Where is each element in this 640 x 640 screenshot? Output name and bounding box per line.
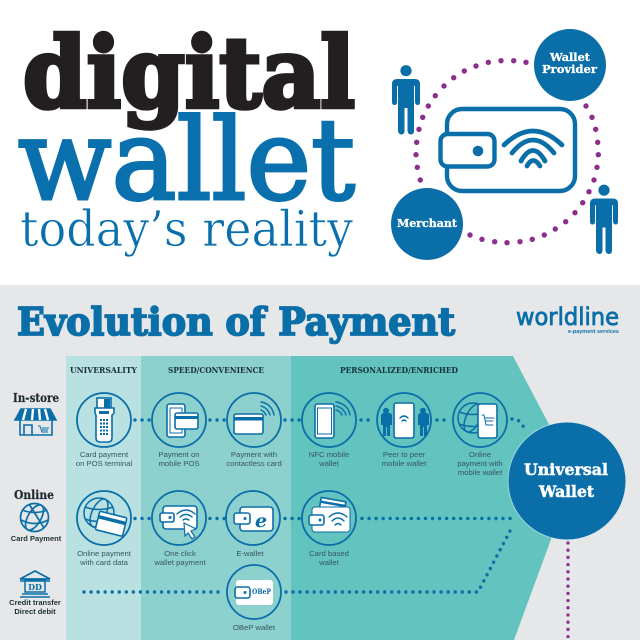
circle: merchant: Merchant xyxy=(397,216,458,230)
row label: credit transfer / direct debit xyxy=(9,571,61,616)
step: NFC mobile wallet: NFC mobile xyxy=(309,450,349,459)
connector dots: row 3 to universal wallet xyxy=(84,531,510,592)
step: online payment with card data: Online payment xyxy=(77,549,132,558)
logo: worldline: worldline xyxy=(516,303,619,331)
icon: bank: DD xyxy=(28,582,42,592)
step: card based wallet xyxy=(302,491,356,567)
step: one click wallet payment: wallet payment xyxy=(153,558,206,567)
row label: in-store xyxy=(13,391,59,435)
step: card payment on POS terminal xyxy=(76,393,132,468)
step: e-wallet: e xyxy=(255,510,267,532)
step: peer to peer mobile wallet xyxy=(377,393,431,468)
step: one click wallet payment xyxy=(152,491,206,567)
icon: left person xyxy=(392,65,420,134)
step: card based wallet: wallet xyxy=(318,558,340,567)
step: one click wallet payment: One click xyxy=(164,549,196,558)
step: payment with contactless card: contactless card xyxy=(226,459,282,468)
purple dotted line from universal wallet xyxy=(566,543,570,640)
title: digital wallet today's reality: today’s reality xyxy=(20,200,354,258)
circle: merchant xyxy=(391,188,463,260)
step: card payment on POS terminal: on POS terminal xyxy=(76,459,132,468)
purple dotted ring xyxy=(416,61,598,243)
step: online payment with mobile wallet: mobile wallet xyxy=(458,468,503,477)
icon: globe xyxy=(20,502,48,533)
step: payment with contactless card xyxy=(226,393,282,468)
title: digital wallet today's reality: digital xyxy=(23,16,355,130)
row label: online: Card Payment xyxy=(11,534,62,543)
step: peer to peer mobile wallet: Peer to peer xyxy=(383,450,426,459)
circle: universal wallet xyxy=(508,422,626,540)
step: online payment with card data xyxy=(77,491,132,567)
row label: credit transfer / direct debit: Credit transfer xyxy=(9,598,61,607)
circle: wallet provider: Wallet xyxy=(549,50,591,64)
icon: wallet with contactless waves xyxy=(440,109,575,191)
icon: right person xyxy=(590,185,618,254)
step: payment on mobile POS: mobile POS xyxy=(158,459,200,468)
step: OBeP wallet: OBeP wallet xyxy=(233,623,276,632)
circle: wallet provider: Provider xyxy=(542,62,598,76)
column headings xyxy=(70,366,459,376)
step: payment on mobile POS: Payment on xyxy=(158,450,200,459)
connector dots: row 1 xyxy=(135,419,528,431)
row label: credit transfer / direct debit: Direct debit xyxy=(14,607,56,616)
step: online payment with card data: with card data xyxy=(79,558,129,567)
circle: wallet provider xyxy=(534,29,606,101)
row label: online: Online xyxy=(14,488,54,502)
panel: evolution arrow bands xyxy=(66,356,575,640)
step: card payment on POS terminal: Card payment xyxy=(80,450,129,459)
title: digital wallet today's reality xyxy=(18,16,355,258)
column headings: SPEED/CONVENIENCE xyxy=(168,366,264,376)
step: OBeP wallet: OBeP xyxy=(252,587,272,596)
circle: universal wallet: Wallet xyxy=(538,482,595,501)
step: NFC mobile wallet: wallet xyxy=(318,459,340,468)
row label: online xyxy=(11,488,62,543)
icon: shop xyxy=(15,409,56,435)
diagram: wallet ecosystem xyxy=(391,29,618,260)
circle: universal wallet: Universal xyxy=(524,460,608,479)
step: online payment with mobile wallet xyxy=(453,393,507,477)
title: digital wallet today's reality: wallet xyxy=(18,96,355,226)
step: card based wallet: Card based xyxy=(309,549,349,558)
connector dots: row 2 xyxy=(135,517,516,520)
column headings: UNIVERSALITY xyxy=(70,366,138,376)
step: online payment with mobile wallet: payment with xyxy=(457,459,503,468)
row label: in-store: In-store xyxy=(13,391,59,405)
logo: worldline: e-payment services xyxy=(568,329,619,335)
column headings: PERSONALIZED/ENRICHED xyxy=(340,366,459,376)
step: payment on mobile POS xyxy=(152,393,206,468)
step: e-wallet: E-wallet xyxy=(236,549,265,558)
step: NFC mobile wallet xyxy=(302,393,356,468)
step: payment with contactless card: Payment with xyxy=(231,450,277,459)
step: peer to peer mobile wallet: mobile wallet xyxy=(382,459,427,468)
step: OBeP wallet xyxy=(227,565,281,632)
step: online payment with mobile wallet: Online xyxy=(469,450,491,459)
step: e-wallet xyxy=(226,491,280,558)
heading: evolution of payment: Evolution of Payment xyxy=(17,299,455,344)
